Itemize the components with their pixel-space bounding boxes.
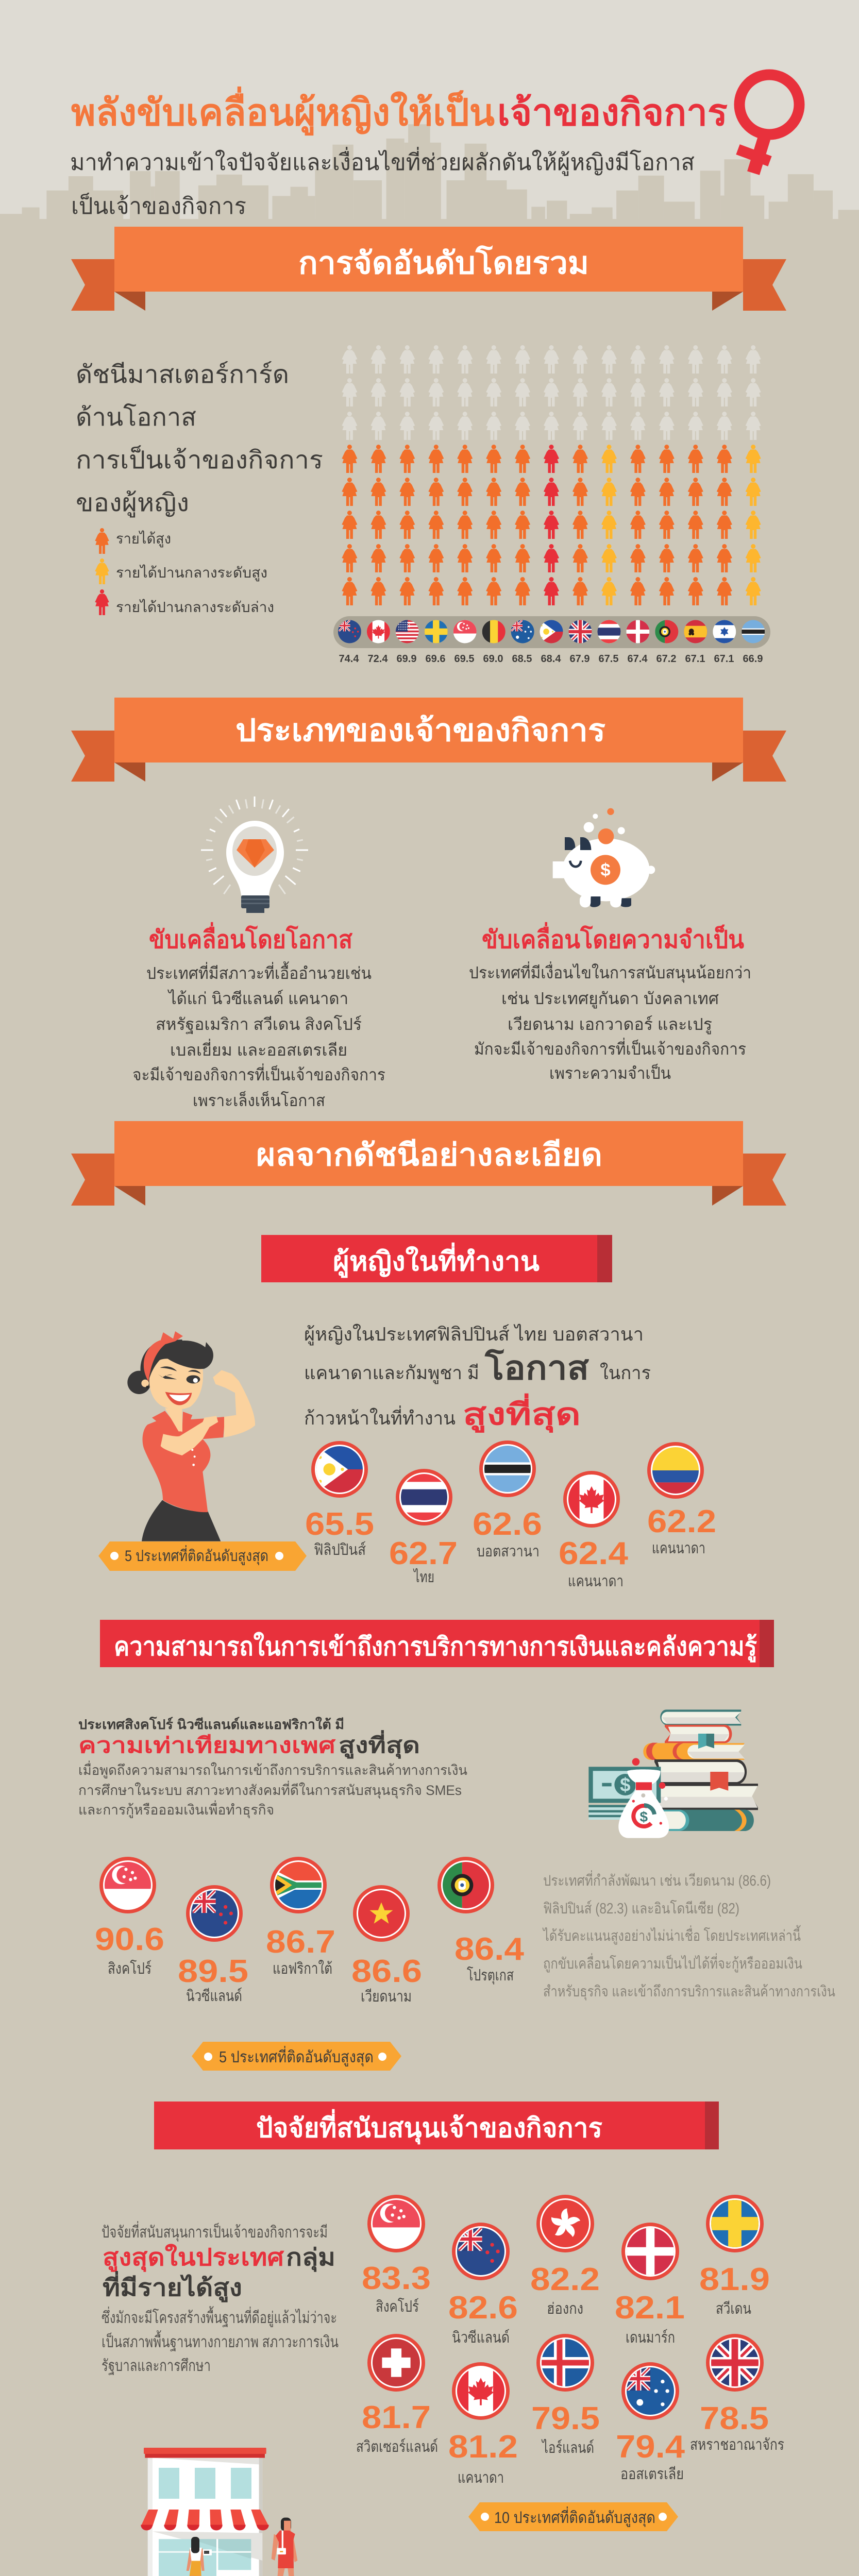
top 5 finance countries: เวียดนาม — [361, 1988, 412, 2005]
title: เจ้าของกิจการ — [497, 92, 728, 133]
banner: access to finance and knowledge: ความสามารถในการเข้าถึงการบริการทางการเงินและคลังความรู้ — [114, 1632, 757, 1663]
scores: 69.0 — [483, 653, 503, 665]
column rows: grey — [342, 345, 761, 440]
top 10 supporting countries: 83.3 — [362, 2261, 431, 2296]
illustration: flexing woman — [127, 1331, 255, 1541]
callout: top 5 badge — [98, 1541, 307, 1571]
banner: women in the workplace — [261, 1235, 612, 1282]
callout: top 5 badge: 5 ประเทศที่ติดอันดับสูงสุด — [125, 1545, 268, 1566]
icon: light bulb with diamond — [201, 796, 308, 913]
top 5 workplace countries: 62.4 — [559, 1536, 629, 1571]
scores: 67.1 — [714, 653, 734, 665]
top 5 finance countries: 86.7 — [266, 1924, 335, 1960]
body text: มักจะมีเจ้าของกิจการที่เป็นเจ้าของกิจการ — [474, 1038, 746, 1058]
icon: piggy bank: $ — [600, 860, 611, 880]
top 10 supporting countries: แคนาดา — [458, 2469, 504, 2486]
top 10 supporting countries: 81.2 — [448, 2429, 518, 2465]
legend: รายได้ปานกลางระดับล่าง — [116, 599, 274, 615]
heading: index name: ด้านโอกาส — [76, 403, 196, 431]
top 10 supporting countries: สวีเดน — [716, 2300, 751, 2317]
top 5 finance countries: สิงคโปร์ — [108, 1959, 151, 1977]
text block: developing countries: ถูกขับเคลื่อนโดยความเป็นไปได้ที่จะกู้หรือออมเงิน — [543, 1953, 802, 1973]
scores: 72.4 — [368, 653, 388, 665]
scores: 67.4 — [628, 653, 648, 665]
scores: 69.5 — [454, 653, 474, 665]
scores: 69.6 — [426, 653, 445, 665]
body text: สหรัฐอเมริกา สวีเดน สิงคโปร์ — [156, 1015, 362, 1035]
city skyline — [0, 124, 859, 260]
text block: workplace: สูงที่สุด — [463, 1393, 581, 1433]
top 10 supporting countries: 82.2 — [530, 2262, 600, 2297]
legend: รายได้ปานกลางระดับสูง — [116, 565, 267, 582]
text block: supporting conditions: ซึ่งมักจะมีโครงสร้างพื้นฐานที่ดีอยู่แล้วไม่ว่าจะ — [102, 2306, 337, 2327]
body text: ได้แก่ นิวซีแลนด์ แคนาดา — [167, 989, 348, 1008]
text block: workplace — [304, 1324, 651, 1433]
top 10 supporting countries: เดนมาร์ก — [626, 2329, 675, 2346]
top 10 supporting countries — [356, 2195, 784, 2486]
top 10 supporting countries: ออสเตรเลีย — [620, 2466, 684, 2483]
top 5 workplace countries: 62.7 — [389, 1536, 458, 1571]
scores: 67.1 — [685, 653, 705, 665]
text block: gender equality: สูงที่สุด — [339, 1730, 420, 1759]
body text: ประเทศที่มีสภาวะที่เอื้ออำนวยเช่น — [146, 961, 372, 982]
text block: gender equality: และการกู้หรือออมเงินเพื่อทำธุรกิจ — [78, 1800, 274, 1819]
banner: supporting factors: ปัจจัยที่สนับสนุนเจ้าของกิจการ — [256, 2109, 602, 2145]
panel: necessity driven — [469, 922, 751, 1082]
body text: เวียดนาม เอกวาดอร์ และเปรู — [508, 1015, 712, 1035]
body text: เพราะความจำเป็น — [549, 1063, 671, 1082]
legend: รายได้สูง — [116, 531, 171, 548]
heading: index name: ดัชนีมาสเตอร์การ์ด — [76, 361, 289, 388]
top 5 finance countries: 86.6 — [351, 1954, 422, 1989]
top 5 workplace countries: ฟิลิปปินส์ — [314, 1541, 366, 1558]
heading: index name — [76, 361, 323, 518]
subtitle: เป็นเจ้าของกิจการ — [71, 193, 246, 219]
legend — [95, 528, 274, 615]
body text — [469, 961, 751, 1082]
callout: top 10 badge — [468, 2502, 678, 2531]
top 5 workplace countries: บอตสวานา — [477, 1543, 540, 1560]
scores: 68.5 — [512, 653, 532, 665]
heading: ขับเคลื่อนโดยโอกาส — [149, 922, 353, 954]
title: พลังขับเคลื่อนผู้หญิงให้เป็น — [71, 86, 495, 136]
partial row — [342, 412, 761, 440]
callout: top 10 badge: 10 ประเทศที่ติดอันดับสูงสุด — [494, 2506, 655, 2528]
banner: access to finance and knowledge — [100, 1620, 774, 1667]
illustration: books and money bag: $ — [620, 1774, 631, 1795]
text block: workplace: ผู้หญิงในประเทศฟิลิปปินส์ ไทย บอตสวานา — [304, 1324, 644, 1346]
top 10 supporting countries: 78.5 — [700, 2401, 769, 2436]
top 10 supporting countries: 81.7 — [362, 2400, 431, 2435]
top 10 supporting countries: สวิตเซอร์แลนด์ — [356, 2438, 438, 2455]
panel: opportunity driven — [132, 922, 385, 1110]
body text: เพราะเล็งเห็นโอกาส — [193, 1091, 325, 1110]
text block: gender equality: การศึกษาในระบบ สภาวะทางสังคมที่ดีในการสนับสนุนธุรกิจ SMEs — [78, 1781, 462, 1799]
full rows orange — [342, 445, 761, 605]
callout: top 5 badge: 5 ประเทศที่ติดอันดับสูงสุด — [219, 2046, 374, 2067]
body text: เบลเยี่ยม และออสเตรเลีย — [170, 1039, 347, 1059]
text block: workplace: ในการ — [600, 1362, 651, 1383]
banner: supporting factors — [154, 2102, 719, 2149]
scores: 68.4 — [541, 653, 561, 665]
pictogram chart — [342, 345, 761, 605]
scores: 74.4 — [339, 653, 359, 665]
top 5 workplace countries: ไทย — [413, 1568, 434, 1586]
icon: piggy bank — [553, 808, 655, 907]
top 5 finance countries: นิวซีแลนด์ — [186, 1987, 242, 2005]
top 10 supporting countries: ไอร์แลนด์ — [541, 2438, 594, 2456]
text block: developing countries: ได้รับคะแนนสูงอย่างไม่น่าเชื่อ โดยประเทศเหล่านี้ — [542, 1925, 801, 1945]
text block: supporting conditions: ที่มีรายได้สูง — [103, 2271, 242, 2302]
top 10 supporting countries: 79.5 — [531, 2401, 600, 2436]
banner: women in the workplace: ผู้หญิงในที่ทำงาน — [333, 1243, 540, 1278]
text block: workplace: ก้าวหน้าในที่ทำงาน — [304, 1405, 456, 1429]
text block: supporting conditions: ปัจจัยที่สนับสนุนการเป็นเจ้าของกิจการจะมี — [102, 2221, 328, 2242]
top 10 supporting countries: 79.4 — [616, 2429, 685, 2465]
flag strip — [333, 616, 770, 648]
title — [71, 86, 728, 136]
scores: 69.9 — [397, 653, 416, 665]
text block: developing countries — [542, 1870, 835, 2001]
top 5 finance countries: 86.4 — [454, 1931, 525, 1967]
ribbon: overall ranking — [71, 227, 786, 311]
body text: จะมีเจ้าของกิจการที่เป็นเจ้าของกิจการ — [132, 1063, 385, 1084]
text block: supporting conditions: สูงสุดในประเทศ — [103, 2243, 284, 2272]
text block: developing countries: ประเทศที่กำลังพัฒนา เช่น เวียดนาม (86.6) — [543, 1870, 771, 1889]
scores: 67.2 — [656, 653, 676, 665]
subtitle: มาทำความเข้าใจปัจจัยและเงื่อนไขที่ช่วยผลักดันให้ผู้หญิงมีโอกาส — [70, 146, 695, 176]
scores — [339, 653, 763, 665]
top 10 supporting countries: สหราชอาณาจักร — [690, 2436, 784, 2453]
illustration: books and money bag — [588, 1709, 758, 1838]
top 10 supporting countries: 81.9 — [699, 2262, 770, 2297]
top 5 workplace countries — [305, 1440, 716, 1590]
top 5 finance countries: 90.6 — [95, 1922, 164, 1957]
text block: supporting conditions: เป็นสภาพพื้นฐานทางกายภาพ สภาวะการเงิน — [102, 2330, 339, 2351]
text block: gender equality: ประเทศสิงคโปร์ นิวซีแลนด์และแอฟริกาใต้ มี — [78, 1716, 344, 1732]
top 5 finance countries — [95, 1857, 525, 2005]
ribbon: entrepreneur types — [71, 698, 786, 782]
text block: supporting conditions — [102, 2221, 339, 2375]
text block: workplace: โอกาส — [484, 1348, 589, 1386]
body text: เช่น ประเทศยูกันดา บังคลาเทศ — [501, 989, 719, 1009]
top 5 finance countries: โปรตุเกส — [467, 1966, 514, 1985]
text block: workplace: แคนาดาและกัมพูชา มี — [304, 1362, 479, 1384]
subtitle — [70, 146, 695, 219]
text block: developing countries: ฟิลิปปินส์ (82.3) และอินโดนีเซีย (82) — [543, 1900, 739, 1917]
heading: index name: การเป็นเจ้าของกิจการ — [76, 445, 323, 474]
illustration: books and money bag: $ — [640, 1809, 648, 1825]
body text: ประเทศที่มีเงื่อนไขในการสนับสนุนน้อยกว่า — [469, 961, 751, 983]
top 5 workplace countries: แคนนาดา — [652, 1540, 705, 1557]
heading: index name: ของผู้หญิง — [76, 489, 189, 518]
heading: ขับเคลื่อนโดยความจำเป็น — [482, 922, 744, 954]
top 10 supporting countries: ฮ่องกง — [547, 2300, 583, 2317]
top 5 finance countries: แอฟริกาใต้ — [273, 1960, 332, 1977]
ribbon: detailed results — [71, 1121, 786, 1206]
text block: supporting conditions: กลุ่ม — [286, 2244, 335, 2272]
scores: 67.5 — [599, 653, 618, 665]
top 5 workplace countries: แคนนาดา — [568, 1573, 624, 1590]
top 5 workplace countries: 62.6 — [473, 1506, 542, 1542]
ribbon: detailed results: ผลจากดัชนีอย่างละเอียด — [256, 1138, 602, 1172]
top 5 finance countries: 89.5 — [178, 1954, 248, 1989]
scores: 66.9 — [743, 653, 763, 665]
text block: gender equality: ความเท่าเทียมทางเพศ — [78, 1733, 336, 1757]
top 5 workplace countries: 62.2 — [647, 1504, 716, 1539]
body text — [132, 961, 385, 1110]
top 5 workplace countries: 65.5 — [305, 1506, 374, 1542]
ribbon: entrepreneur types: ประเภทของเจ้าของกิจการ — [235, 713, 605, 748]
top 10 supporting countries: 82.1 — [615, 2290, 685, 2326]
top 10 supporting countries: 82.6 — [448, 2290, 518, 2326]
icon: female symbol — [738, 75, 799, 173]
text block: supporting conditions: รัฐบาลและการศึกษา — [102, 2357, 211, 2375]
scores: 67.9 — [570, 653, 589, 665]
callout: top 5 badge — [192, 2042, 401, 2071]
ribbon: overall ranking: การจัดอันดับโดยรวม — [298, 245, 589, 280]
top 10 supporting countries: นิวซีแลนด์ — [452, 2329, 510, 2346]
top 10 supporting countries: สิงคโปร์ — [376, 2297, 419, 2315]
text block: gender equality — [78, 1716, 467, 1819]
illustration: shop — [141, 2448, 301, 2576]
text block: gender equality: เมื่อพูดถึงความสามารถในการเข้าถึงการบริการและสินค้าทางการเงิน — [78, 1760, 467, 1778]
